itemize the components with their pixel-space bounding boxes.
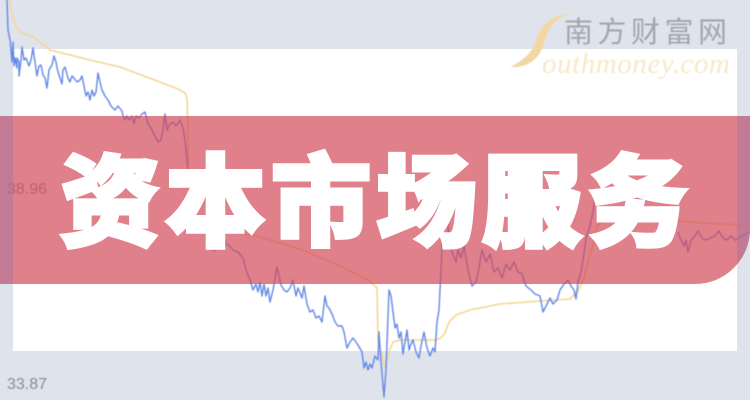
logo swoosh bbox=[510, 14, 568, 68]
red title band bbox=[0, 116, 750, 284]
title: 资本市场服务 bbox=[60, 148, 693, 260]
chart panel background bbox=[13, 49, 737, 351]
price line bbox=[7, 0, 189, 180]
lower axis label: 33.87 bbox=[7, 376, 47, 393]
right margin shade bbox=[737, 116, 750, 284]
logo chinese name: 南方财富网 bbox=[564, 9, 732, 51]
logo latin name: outhmoney.com bbox=[542, 48, 730, 80]
upper axis label: 38.96 bbox=[7, 181, 47, 198]
left margin shade bbox=[0, 116, 13, 284]
logo: southmoney bbox=[510, 9, 732, 80]
